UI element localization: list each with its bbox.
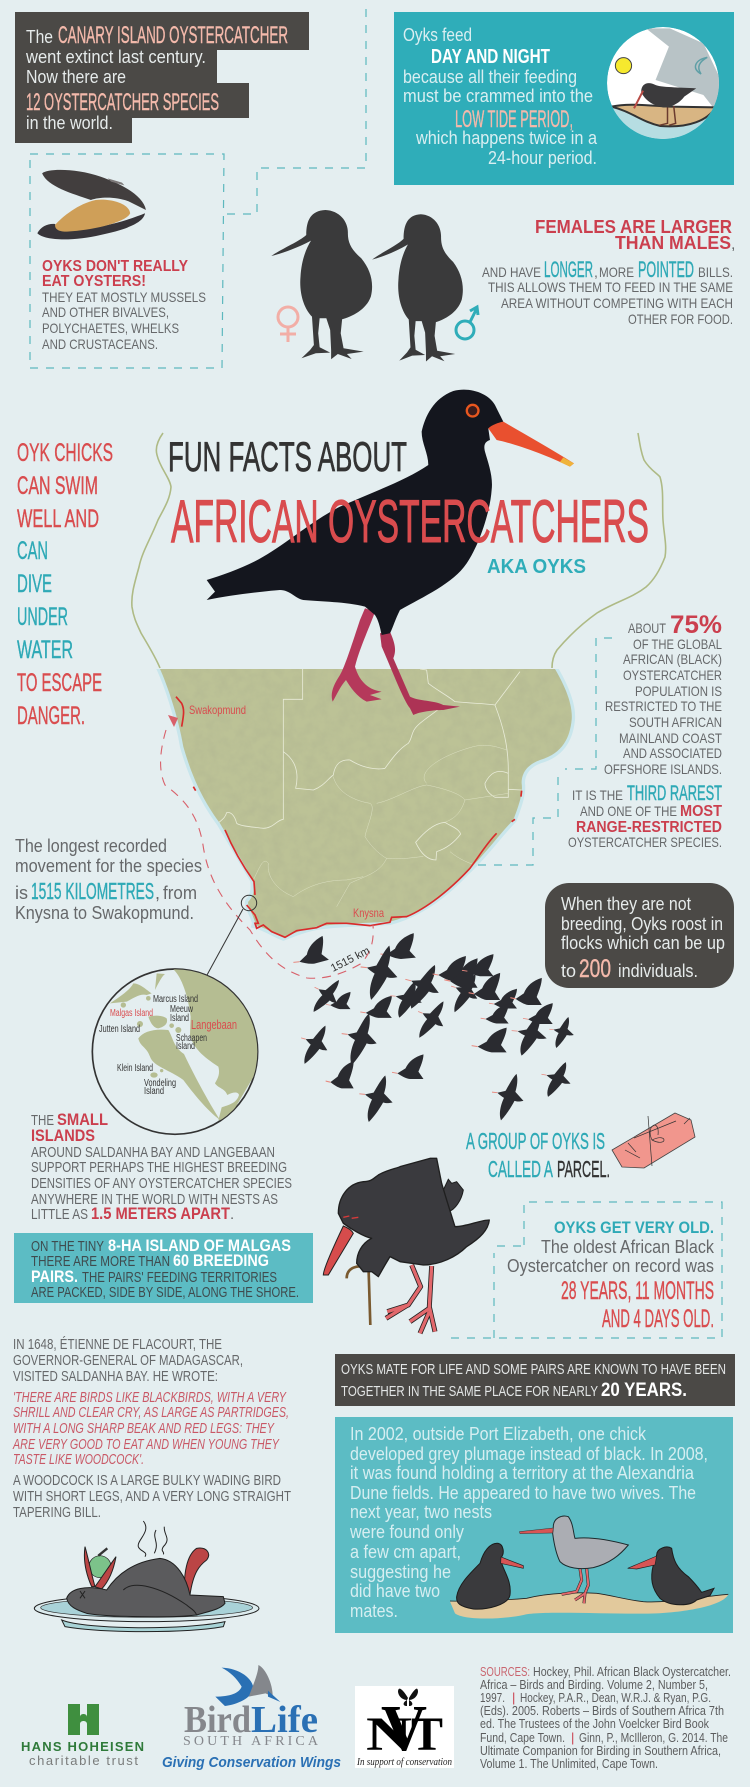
logo: birdlife south africa	[162, 1665, 341, 1771]
text: oyk chicks can swim: DIVE	[17, 570, 52, 598]
map inset: saldanha bay islands: Meeuw	[170, 1004, 194, 1015]
panel: 8-ha island of malgas: THERE ARE MORE THAN	[31, 1253, 170, 1270]
eyes	[343, 1216, 358, 1218]
logo: nvt: N	[366, 1708, 412, 1761]
text: small islands: 1.5 METERS APART	[91, 1204, 231, 1223]
text: females are larger than males: BILLS.	[698, 264, 733, 280]
panel: roosting flocks: 200	[579, 955, 611, 983]
bird silhouettes: female and male	[271, 210, 478, 362]
logo: nvt: In support of conservation	[356, 1756, 452, 1768]
text: small islands	[31, 1110, 292, 1223]
text: small islands: .	[230, 1206, 234, 1223]
panel: oyks don't really eat oysters: AND CRUSTACEANS.	[42, 336, 158, 352]
dashed connector around the range text	[478, 638, 612, 865]
text: de flacourt quote: GOVERNOR-GENERAL OF MADAGASCAR,	[13, 1352, 243, 1369]
panel: grey plumage bird with two wives: a few cm apart,	[350, 1542, 461, 1562]
flock of flying oystercatchers	[289, 933, 574, 1122]
panel: roosting flocks: breeding, Oyks roost in	[561, 914, 723, 934]
steam	[138, 1521, 167, 1557]
panel: canary island oystercatcher	[15, 12, 309, 143]
roasted body	[67, 1558, 225, 1617]
panel: 8-ha island of malgas	[14, 1233, 313, 1303]
legs	[386, 1265, 435, 1333]
text: 75 percent population: OYSTERCATCHER	[623, 667, 722, 683]
body	[338, 1158, 489, 1277]
icon: pink parcel	[612, 1113, 695, 1168]
text: females are larger than males: FEMALES ARE LARGER	[535, 217, 732, 237]
sources: Africa – Birds and Birding. Volume 2, Number 5,	[480, 1677, 708, 1692]
sandbank	[450, 1593, 728, 1619]
sources: 1997.	[480, 1690, 505, 1705]
beak	[488, 422, 574, 467]
text: a group is called a parcel: A GROUP OF OYKS IS	[466, 1128, 605, 1154]
dashed flight route 1515 km	[161, 715, 373, 978]
text: longest recorded movement: The longest recorded	[15, 836, 167, 856]
logo: hans hoheisen charitable trust: HANS HOHEISEN	[21, 1739, 144, 1754]
text: oyk chicks can swim: WATER	[17, 636, 73, 664]
text: small islands: DENSITIES OF ANY OYSTERCATCHER SPECIES	[31, 1175, 292, 1192]
quote in red italics: WITH A LONG SHARP BEAK AND RED LEGS: THEY	[13, 1420, 275, 1437]
text: 75 percent population: AFRICAN (BLACK)	[623, 651, 722, 667]
illustration: cooked bird on plate	[34, 1521, 259, 1632]
map inset: saldanha bay islands: Marcus Island	[153, 994, 198, 1005]
map inset: saldanha bay islands: Island	[144, 1086, 164, 1097]
sources: |	[571, 1730, 574, 1745]
text: third rarest: IT IS THE	[572, 787, 623, 803]
panel: oyks get very old: The oldest African Black	[541, 1237, 715, 1257]
sources: Volume 1. The Unlimited, Cape Town.	[480, 1756, 658, 1771]
panel: grey plumage bird with two wives: it was found holding a territory at the Alexandria	[350, 1463, 695, 1483]
map inset: saldanha bay islands	[92, 967, 263, 1134]
text: de flacourt quote	[12, 1336, 291, 1521]
grey bird legs	[562, 1568, 588, 1603]
text: longest recorded movement: is	[15, 883, 28, 903]
panel: oyks don't really eat oysters	[30, 154, 224, 368]
text: longest recorded movement: 1515 KILOMETRES	[31, 878, 154, 904]
text: de flacourt quote: VISITED SALDANHA BAY. HE WROTE:	[13, 1368, 218, 1385]
panel: 8-ha island of malgas: 60 BREEDING	[173, 1251, 269, 1270]
panel: canary island oystercatcher: Now there are	[26, 67, 126, 87]
text: longest recorded movement: from	[163, 883, 197, 903]
text: 75 percent population: OF THE GLOBAL	[633, 636, 722, 652]
panel: grey plumage bird with two wives: In 2002, outside Port Elizabeth, one chick	[350, 1424, 647, 1444]
panel: grey plumage bird with two wives	[335, 1417, 733, 1633]
text: females are larger than males	[482, 217, 735, 327]
text: 75 percent population: OFFSHORE ISLANDS.	[604, 761, 722, 777]
text: females are larger than males: THAN MALES	[615, 233, 731, 253]
text: oyk chicks can swim: OYK CHICKS	[17, 439, 113, 467]
title: AKA OYKS	[487, 556, 586, 578]
panel: roosting flocks: When they are not	[561, 894, 691, 914]
panel: grey plumage bird with two wives: next year, two nests	[350, 1502, 492, 1522]
plate	[62, 1620, 225, 1632]
logo: hans hoheisen charitable trust	[21, 1704, 144, 1768]
panel: oyks don't really eat oysters: OYKS DON'T REALLY	[42, 258, 188, 275]
text: 75 percent population: RESTRICTED TO THE	[605, 698, 722, 714]
panel: day and night feeding: because all their feeding	[403, 67, 577, 87]
panel: oyks get very old	[445, 1202, 722, 1338]
panel: grey plumage bird with two wives: Dune fields. He appeared to have two wives. The	[350, 1483, 696, 1503]
panel: day and night feeding: 24-hour period.	[488, 148, 597, 168]
text: oyk chicks can swim: CAN	[17, 537, 48, 565]
panel: day and night feeding: must be crammed into the	[403, 86, 593, 106]
logo: nvt	[355, 1686, 454, 1768]
logo: birdlife south africa: Giving Conservation Wings	[162, 1754, 341, 1771]
text: longest recorded movement: ,	[155, 883, 160, 903]
sources: SOURCES:	[480, 1664, 530, 1679]
panel: canary island oystercatcher: CANARY ISLAND OYSTERCATCHER	[58, 22, 288, 49]
panel: grey plumage bird with two wives: suggesting he	[350, 1562, 451, 1582]
connector dashed line from feeding panel to mussel box	[224, 9, 366, 214]
text: 75 percent population: POPULATION IS	[635, 683, 722, 699]
panel: day and night feeding: which happens twice in a	[415, 128, 598, 148]
apple	[89, 1556, 111, 1578]
text: females are larger than males: AND HAVE	[482, 264, 541, 280]
text: third rarest: MOST	[680, 803, 722, 820]
text: females are larger than males: LONGER	[544, 257, 593, 282]
text: a group is called a parcel: PARCEL.	[557, 1156, 610, 1182]
panel: day and night feeding: DAY AND NIGHT	[431, 46, 550, 68]
panel: day and night feeding	[394, 12, 734, 185]
panel: 8-ha island of malgas: ON THE TINY	[31, 1238, 104, 1255]
title	[168, 433, 649, 578]
text: females are larger than males: POINTED	[638, 257, 694, 282]
beak	[323, 1226, 353, 1275]
text: oyk chicks can swim: CAN SWIM	[17, 472, 98, 500]
text: 75 percent population: AND ASSOCIATED	[623, 745, 722, 761]
text: small islands: ANYWHERE IN THE WORLD WITH NESTS AS	[31, 1191, 278, 1208]
left black bird	[457, 1543, 510, 1609]
text: 75 percent population	[604, 611, 722, 777]
red range coastline	[176, 697, 522, 937]
sources: |	[512, 1690, 515, 1705]
text: females are larger than males: MORE	[599, 264, 634, 280]
text: longest recorded movement: Knysna to Swakopmund.	[15, 903, 194, 923]
text: oyk chicks can swim: WELL AND	[17, 505, 99, 533]
locator circle and leader line	[207, 895, 257, 975]
panel: 8-ha island of malgas: THE PAIRS' FEEDING TERRITORIES	[82, 1269, 277, 1286]
text: oyk chicks can swim: TO ESCAPE	[17, 669, 102, 697]
map labels	[189, 703, 384, 920]
logo: birdlife south africa: Life	[251, 1699, 318, 1741]
illustration: three birds on a sandbank	[450, 1516, 728, 1619]
text: third rarest: AND ONE OF THE	[580, 803, 677, 819]
eye	[466, 404, 480, 418]
map inset: saldanha bay islands: Vondeling	[144, 1078, 176, 1089]
text: de flacourt quote: A WOODCOCK IS A LARGE BULKY WADING BIRD	[13, 1472, 281, 1489]
panel: oyks don't really eat oysters: AND OTHER BIVALVES,	[42, 304, 169, 320]
right black bird	[652, 1547, 714, 1605]
text: third rarest: RANGE-RESTRICTED	[576, 819, 722, 836]
text: 75 percent population: SOUTH AFRICAN	[629, 714, 722, 730]
logo: birdlife south africa: Bird	[184, 1699, 251, 1741]
logo: hans hoheisen charitable trust: charitable trust	[29, 1753, 138, 1768]
panel: canary island oystercatcher: in the world.	[26, 113, 113, 133]
title: FUN FACTS ABOUT	[168, 433, 407, 480]
text: de flacourt quote: WITH SHORT LEGS, AND A VERY LONG STRAIGHT	[13, 1488, 291, 1505]
panel: grey plumage bird with two wives: mates.	[350, 1601, 398, 1621]
panel: oyks mate for life: 20 YEARS.	[601, 1380, 687, 1401]
map inset: saldanha bay islands: Schaapen	[176, 1033, 207, 1044]
tail	[443, 1179, 463, 1212]
icon: male symbol	[456, 307, 478, 339]
icon: female symbol	[278, 307, 298, 342]
map inset: saldanha bay islands: Island	[170, 1013, 189, 1024]
text: third rarest	[568, 782, 722, 850]
africa outline	[132, 433, 666, 668]
text: 75 percent population: MAINLAND COAST	[619, 730, 722, 746]
logo: nvt: T	[411, 1708, 443, 1761]
logo: birdlife south africa: SOUTH AFRICA	[183, 1734, 319, 1749]
text: females are larger than males: ,	[731, 236, 735, 253]
near leg	[380, 632, 460, 715]
quote in red italics: 'THERE ARE BIRDS LIKE BLACKBIRDS, WITH A VERY	[13, 1389, 287, 1406]
panel: grey plumage bird with two wives: did have two	[350, 1581, 440, 1601]
panel: 8-ha island of malgas: ARE PACKED, SIDE BY SIDE, ALONG THE SHORE.	[31, 1284, 299, 1301]
text: small islands: ISLANDS	[31, 1126, 95, 1145]
map of southern africa	[160, 669, 572, 937]
map inset: saldanha bay islands: Klein Island	[117, 1063, 153, 1074]
text: longest recorded movement: movement for the species	[15, 856, 202, 876]
panel: oyks mate for life: TOGETHER IN THE SAME PLACE FOR NEARLY	[341, 1383, 598, 1400]
panel: 8-ha island of malgas: PAIRS.	[31, 1267, 78, 1286]
map inset: saldanha bay islands: Langebaan	[191, 1017, 237, 1032]
sources: Fund, Cape Town.	[480, 1730, 565, 1745]
dashed flight route 1515 km: 1515 km	[329, 945, 372, 975]
icon: mussel	[37, 170, 146, 239]
red legs	[84, 1547, 209, 1595]
panel: day and night feeding: LOW TIDE PERIOD,	[455, 106, 573, 133]
grey bird	[553, 1516, 628, 1569]
text: longest recorded movement	[15, 836, 202, 923]
text: small islands: SUPPORT PERHAPS THE HIGHEST BREEDING	[31, 1159, 287, 1176]
panel: grey plumage bird with two wives: were found only	[349, 1522, 464, 1542]
text: small islands: AROUND SALDANHA BAY AND LANGEBAAN	[31, 1144, 275, 1161]
logo: nvt: V	[381, 1692, 427, 1765]
panel: roosting flocks: to	[561, 961, 576, 981]
map labels: Knysna	[353, 906, 384, 920]
panel: oyks don't really eat oysters: THEY EAT MOSTLY MUSSELS	[42, 289, 206, 305]
text: small islands: LITTLE AS	[31, 1206, 88, 1223]
panel: roosting flocks: flocks which can be up	[561, 933, 725, 953]
panel: canary island oystercatcher: went extinct last century.	[25, 47, 206, 67]
text: 75 percent population: 75%	[670, 611, 722, 639]
quote in red italics: TASTE LIKE WOODCOCK'.	[13, 1451, 144, 1468]
text: oyk chicks can swim: DANGER.	[17, 702, 85, 730]
text: small islands: SMALL	[57, 1110, 108, 1129]
panel: oyks don't really eat oysters: POLYCHAETES, WHELKS	[42, 320, 179, 336]
panel: oyks get very old: OYKS GET VERY OLD.	[554, 1218, 714, 1237]
quote in red italics	[12, 1389, 289, 1468]
illustration: old oystercatcher with a cane	[323, 1158, 489, 1333]
text: de flacourt quote: TAPERING BILL.	[13, 1504, 101, 1521]
panel: 8-ha island of malgas: 8-HA ISLAND OF MALGAS	[108, 1236, 291, 1255]
text: oyk chicks can swim	[17, 439, 113, 730]
sources	[480, 1664, 731, 1771]
panel: day and night feeding: Oyks feed	[403, 25, 472, 45]
panel: oyks get very old: Oystercatcher on record was	[507, 1256, 714, 1276]
quote in red italics: ARE VERY GOOD TO EAT AND WHEN YOUNG THEY	[12, 1436, 280, 1453]
map inset: saldanha bay islands: Island	[176, 1041, 195, 1052]
text: 75 percent population: ABOUT	[628, 620, 666, 636]
map inset: saldanha bay islands: Jutten Island	[99, 1024, 140, 1035]
text: small islands: THE	[31, 1112, 54, 1129]
map inset: saldanha bay islands: Malgas Island	[110, 1008, 153, 1019]
panel: roosting flocks	[545, 883, 734, 988]
map labels: Swakopmund	[189, 703, 246, 717]
panel: oyks mate for life	[335, 1354, 735, 1406]
body	[207, 390, 503, 635]
far leg	[332, 608, 382, 702]
main photo: african oystercatcher	[207, 390, 574, 715]
text: de flacourt quote: IN 1648, ÉTIENNE DE FLACOURT, THE	[13, 1336, 222, 1353]
panel: grey plumage bird with two wives: developed grey plumage instead of black. In 2008,	[350, 1444, 708, 1464]
cane	[347, 1266, 370, 1325]
icon: tide scene with feeding bird	[607, 27, 723, 147]
panel: roosting flocks: individuals.	[618, 961, 698, 981]
text: a group is called a parcel	[466, 1128, 610, 1182]
panel: oyks don't really eat oysters: EAT OYSTERS!	[42, 273, 146, 290]
text: a group is called a parcel: CALLED A	[488, 1156, 553, 1182]
panel: canary island oystercatcher: The	[26, 27, 53, 47]
quote in red italics: SHRILL AND CLEAR CRY, AS LARGE AS PARTRIDGES,	[13, 1404, 289, 1421]
text: oyk chicks can swim: UNDER	[17, 603, 68, 631]
panel: canary island oystercatcher: 12 OYSTERCATCHER SPECIES	[26, 89, 219, 116]
text: females are larger than males: ,	[594, 264, 598, 280]
